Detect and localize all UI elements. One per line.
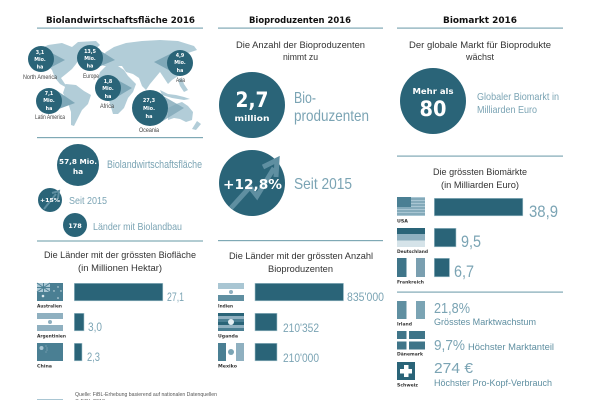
heading: largest markets bbox=[433, 167, 527, 191]
bar: China 2,3: 2,3 bbox=[87, 352, 100, 364]
callout: Oceania: Oceania bbox=[139, 127, 159, 134]
stat: 57,8 Mio. ha: 57,8 Mio. bbox=[59, 157, 97, 166]
bar: USA 38,9 bbox=[434, 198, 558, 221]
flag: India: Indien bbox=[218, 304, 233, 310]
source note: Quelle: FiBL-Erhebung basierend auf nationalen Datenquellen bbox=[75, 392, 217, 398]
callout: Europe: Europe bbox=[83, 73, 99, 80]
stat: 2,7 million producers: produzenten bbox=[294, 108, 369, 125]
bar: Germany 9,5 bbox=[434, 228, 481, 251]
callout: Oceania: Mio. bbox=[143, 106, 155, 112]
bar: Uganda 210'352: 210'352 bbox=[283, 323, 319, 335]
callout: North America bbox=[23, 46, 65, 81]
bar: India 835'000 bbox=[255, 283, 384, 304]
stat: +12,8% since 2015: Seit 2015 bbox=[294, 176, 352, 193]
stat: 178 countries bbox=[63, 213, 182, 237]
record: Switzerland: Höchster Pro-Kopf-Verbrauch bbox=[434, 378, 552, 389]
flag: USA: USA bbox=[397, 218, 408, 224]
bar: Australia 27,1: 27,1 bbox=[167, 292, 184, 304]
text: producers intro bbox=[236, 40, 365, 63]
bar: Argentina 3,0 bbox=[74, 313, 102, 334]
flag: China: China bbox=[37, 364, 52, 370]
record: Denmark bbox=[397, 331, 554, 358]
stat: 57,8 Mio. ha bbox=[57, 144, 202, 186]
bar: China 2,3 bbox=[74, 343, 100, 364]
text: producers intro: nimmt zu bbox=[283, 52, 318, 63]
callout: Latin America: 7,1 bbox=[45, 91, 53, 97]
callout: Latin America: Latin America bbox=[35, 114, 65, 121]
bar: Germany 9,5: 9,5 bbox=[461, 233, 481, 251]
record: Ireland: 21,8% bbox=[434, 300, 470, 317]
stat: 57,8 Mio. ha: Biolandwirtschaftsfläche bbox=[107, 159, 202, 171]
flag: China bbox=[37, 343, 63, 370]
stat: 178 countries: 178 bbox=[68, 222, 82, 230]
callout: Latin America: Mio. bbox=[43, 98, 55, 104]
flag: Uganda: Uganda bbox=[218, 334, 238, 340]
flag: USA bbox=[397, 197, 425, 224]
record: Denmark: 9,7% bbox=[434, 337, 465, 354]
heading: largest organic area: Die Länder mit der grössten Biofläche bbox=[44, 250, 196, 261]
flag: Mexico: Mexiko bbox=[218, 364, 237, 370]
panel: area key figures bbox=[38, 144, 202, 237]
callout: Asia: 4,9 bbox=[176, 53, 185, 59]
flag: Australia bbox=[37, 283, 63, 310]
callout: Africa: 1,8 bbox=[104, 79, 113, 85]
bar chart: markets by country bbox=[397, 197, 558, 286]
stat: 178 countries: Länder mit Biolandbau bbox=[93, 221, 182, 233]
callout: Asia: ha bbox=[177, 68, 183, 74]
bar: Argentina 3,0: 3,0 bbox=[88, 322, 102, 334]
stat: +15% since 2015: +15% bbox=[40, 198, 60, 204]
callout: Latin America bbox=[35, 88, 75, 121]
callout: Africa bbox=[95, 75, 132, 110]
heading: largest producer counts: Die Länder mit der grössten Anzahl bbox=[229, 251, 373, 262]
bar: Uganda 210'352 bbox=[255, 313, 319, 335]
callout: Africa: Africa bbox=[100, 103, 114, 110]
bar chart: producers by country bbox=[218, 283, 384, 370]
stat: +15% since 2015 bbox=[38, 188, 107, 212]
bar: France 6,7: 6,7 bbox=[454, 263, 474, 281]
bar chart: organic area by country bbox=[37, 283, 184, 370]
text: producers intro: Die Anzahl der Bioproduzenten bbox=[236, 40, 365, 51]
panel: market records bbox=[397, 300, 554, 389]
text: market intro: wächst bbox=[465, 52, 494, 63]
callout: Oceania: ha bbox=[146, 114, 152, 120]
record: Ireland: Grösstes Marktwachstum bbox=[434, 317, 536, 328]
heading: largest markets: Die grössten Biomärkte bbox=[433, 167, 527, 178]
callout: Asia bbox=[154, 50, 193, 84]
callout: Africa: Mio. bbox=[102, 86, 114, 92]
heading: Biolandwirtschaftsfläche 2016: Biolandwirtschaftsfläche 2016 bbox=[46, 16, 195, 26]
stat: global market over 80 bbox=[400, 68, 559, 134]
stat: 2,7 million producers: 2,7 bbox=[236, 88, 268, 112]
flag: Germany: Deutschland bbox=[397, 249, 428, 255]
stat: global market over 80: 80 bbox=[420, 97, 446, 121]
bar: India 835'000: 835'000 bbox=[347, 292, 384, 304]
stat: +12,8% since 2015: +12,8% bbox=[223, 178, 282, 193]
callout: Latin America: ha bbox=[46, 106, 52, 112]
callout: North America: North America bbox=[23, 74, 57, 81]
stat: 2,7 million producers: Bio- bbox=[294, 90, 316, 107]
heading: largest producer counts bbox=[229, 251, 373, 275]
stat: global market over 80: Globaler Biomarkt in bbox=[477, 91, 559, 103]
callout: Asia: Mio. bbox=[174, 60, 186, 66]
bar: USA 38,9: 38,9 bbox=[529, 203, 558, 221]
record: Ireland: Irland bbox=[397, 322, 412, 328]
text: market intro: Der globale Markt für Bioprodukte bbox=[409, 40, 551, 51]
callout: Africa: ha bbox=[105, 94, 111, 100]
heading: largest markets: (in Milliarden Euro) bbox=[441, 180, 519, 191]
callout: Asia: Asia bbox=[176, 77, 185, 84]
heading: largest organic area bbox=[44, 250, 196, 274]
callout: Europe: Mio. bbox=[84, 56, 96, 62]
flag: Argentina: Argentinien bbox=[37, 334, 66, 340]
flag: Mexico bbox=[218, 343, 244, 370]
stat: 2,7 million producers: million bbox=[234, 114, 270, 123]
heading: Bioproduzenten 2016: Bioproduzenten 2016 bbox=[249, 16, 351, 26]
flag: Argentina bbox=[37, 313, 66, 340]
callout: Oceania: 27,3 bbox=[143, 98, 156, 104]
callout: Europe: ha bbox=[87, 64, 93, 70]
stat: +15% since 2015: Seit 2015 bbox=[69, 195, 107, 207]
record: Ireland bbox=[397, 300, 536, 328]
record: Switzerland bbox=[397, 360, 552, 389]
record: Denmark: Dänemark bbox=[397, 352, 424, 358]
flag: India bbox=[218, 283, 244, 310]
bar: Australia 27,1 bbox=[74, 283, 184, 304]
callout: North America: 3,1 bbox=[36, 50, 44, 56]
callout: North America: ha bbox=[37, 64, 43, 70]
text: market intro bbox=[409, 40, 551, 63]
callout: Europe: 13,5 bbox=[84, 49, 96, 55]
record: Switzerland: Schweiz bbox=[397, 382, 418, 388]
record: Denmark: Höchster Marktanteil bbox=[468, 342, 554, 353]
stat: global market over 80: Milliarden Euro bbox=[477, 104, 537, 116]
map: continents bbox=[33, 40, 201, 130]
record: Switzerland: 274 € bbox=[434, 360, 474, 377]
bar: Mexico 210'000: 210'000 bbox=[283, 353, 319, 365]
bar: Mexico 210'000 bbox=[255, 343, 319, 365]
bar: France 6,7 bbox=[434, 258, 474, 281]
stat: +12,8% since 2015 bbox=[219, 150, 352, 216]
stat: 57,8 Mio. ha: ha bbox=[73, 167, 83, 176]
callout: Europe bbox=[77, 45, 115, 80]
world map with regional values bbox=[23, 40, 201, 134]
stat: 2,7 million producers bbox=[219, 72, 369, 138]
flag: France: Frankreich bbox=[397, 280, 424, 286]
heading: Biomarkt 2016: Biomarkt 2016 bbox=[443, 16, 517, 26]
flag: Australia: Australien bbox=[37, 304, 62, 310]
flag: France bbox=[397, 258, 425, 286]
flag: Germany bbox=[397, 228, 428, 255]
heading: largest organic area: (in Millionen Hektar) bbox=[78, 263, 162, 274]
flag: Uganda bbox=[218, 313, 244, 340]
stat: global market over 80: Mehr als bbox=[412, 87, 454, 96]
heading: largest producer counts: Bioproduzenten bbox=[268, 264, 333, 275]
callout: North America: Mio. bbox=[34, 57, 46, 63]
callout: Oceania bbox=[132, 90, 184, 134]
